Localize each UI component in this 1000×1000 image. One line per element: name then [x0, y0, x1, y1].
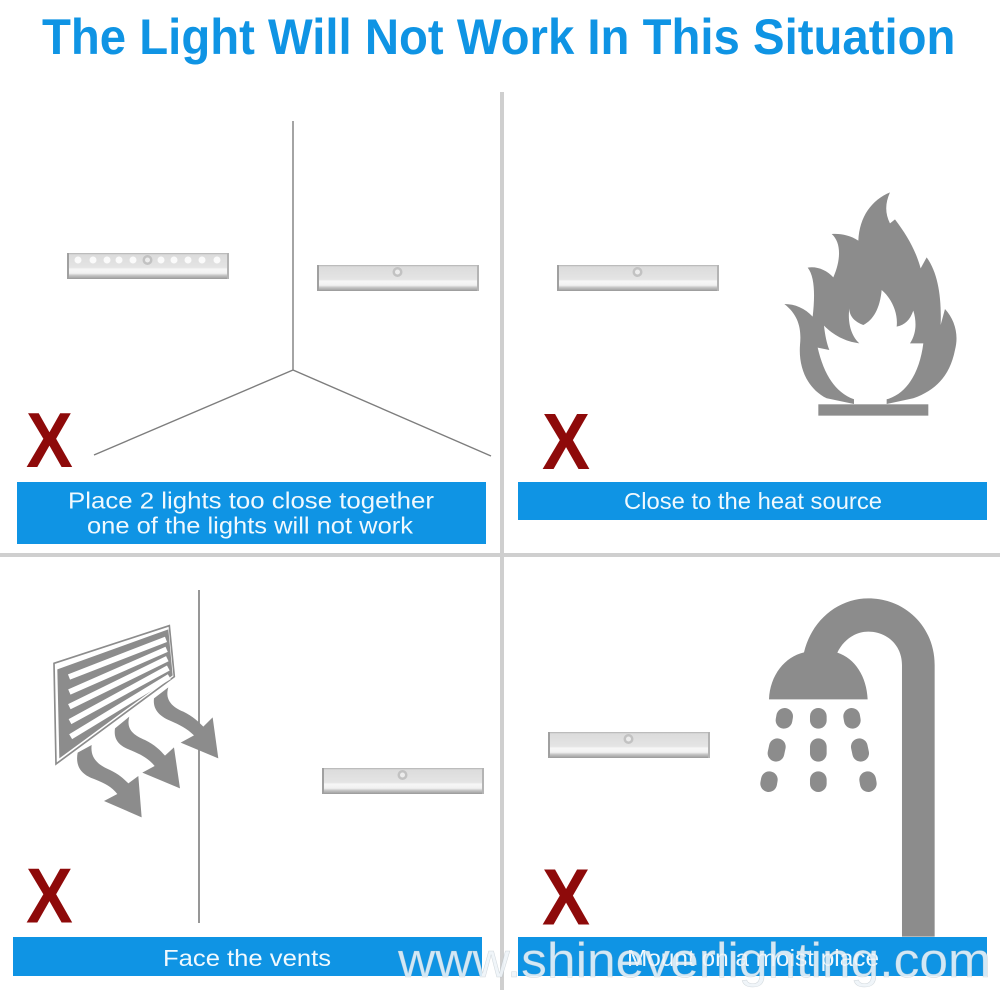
caption: face the vents [13, 937, 482, 976]
wall line [198, 590, 200, 923]
panel: face the vents [13, 590, 484, 976]
caption: mount on a moist place [518, 937, 987, 976]
caption: close to the heat source [518, 482, 987, 520]
light bar on wall [317, 265, 479, 291]
icon: vent with airflow arrows [54, 626, 218, 817]
red X mark: X [26, 397, 73, 484]
panel: moist place [518, 598, 987, 976]
caption: place 2 lights too close: one of the lights will not work [87, 512, 414, 538]
light bar with LEDs visible [67, 253, 229, 279]
horizontal divider [0, 553, 1000, 557]
red X mark: X [26, 852, 73, 939]
caption: mount on a moist place: Mount on a moist place [627, 945, 879, 971]
icon: shower head and pipe [759, 598, 935, 937]
light bar [322, 768, 484, 794]
panel: lights too close together [17, 121, 491, 544]
light bar [548, 732, 710, 758]
panel: close to heat source [518, 192, 987, 520]
red X mark: X [542, 853, 590, 942]
watermark: www.shineverlighting.com [397, 932, 991, 988]
light bar [557, 265, 719, 291]
red X mark: X [542, 398, 590, 487]
room corner lines [94, 121, 491, 456]
vertical divider [500, 92, 504, 990]
title: The Light Will Not Work In This Situation [42, 10, 955, 65]
caption: close to the heat source: Close to the heat source [624, 488, 882, 514]
icon: flame [784, 192, 957, 416]
caption: face the vents: Face the vents [163, 945, 331, 971]
caption: place 2 lights too close: Place 2 lights too close together [68, 488, 434, 514]
caption: place 2 lights too close [17, 482, 486, 544]
